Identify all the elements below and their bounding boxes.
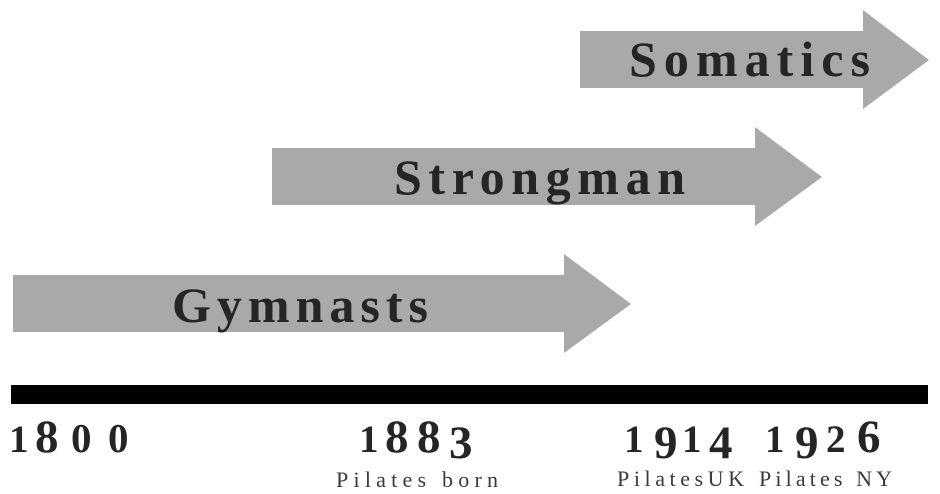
year: 1914: 4 bbox=[709, 417, 732, 469]
arrow: Gymnasts: Gymnasts bbox=[172, 277, 428, 333]
year: 1883: 3 bbox=[449, 417, 472, 469]
year: 1800: 8 bbox=[35, 411, 58, 463]
year: 1800: 0 bbox=[71, 415, 92, 461]
year: 1883 bbox=[336, 411, 498, 492]
year: 1926: 9 bbox=[795, 417, 818, 469]
year: 1926: 1 bbox=[765, 418, 784, 461]
year: 1800: 1 bbox=[9, 418, 28, 461]
year: 1926: 6 bbox=[857, 411, 880, 463]
year: 1914: 1 bbox=[624, 418, 644, 461]
label: Pilates NY: Pilates NY bbox=[759, 466, 892, 491]
year: 1914: 9 bbox=[654, 417, 678, 469]
year: 1883: 1 bbox=[359, 418, 378, 461]
year: 1914: 1 bbox=[682, 418, 702, 461]
year: 1926 bbox=[759, 411, 892, 491]
year: 1914 bbox=[617, 417, 744, 491]
year: 1883: 8 bbox=[417, 411, 440, 463]
arrow: Somatics bbox=[580, 10, 929, 109]
arrow: Gymnasts bbox=[13, 254, 631, 353]
year: 1883: 8 bbox=[385, 411, 408, 463]
timeline bar bbox=[11, 385, 928, 404]
arrow: Somatics: Somatics bbox=[629, 31, 870, 87]
arrow: Strongman bbox=[272, 127, 822, 226]
label: PilatesUK: PilatesUK bbox=[617, 466, 744, 491]
label: Pilates born: Pilates born bbox=[336, 467, 498, 492]
arrow: Strongman: Strongman bbox=[394, 149, 685, 205]
year: 1926: 2 bbox=[826, 418, 846, 461]
year: 1800: 0 bbox=[108, 415, 128, 461]
